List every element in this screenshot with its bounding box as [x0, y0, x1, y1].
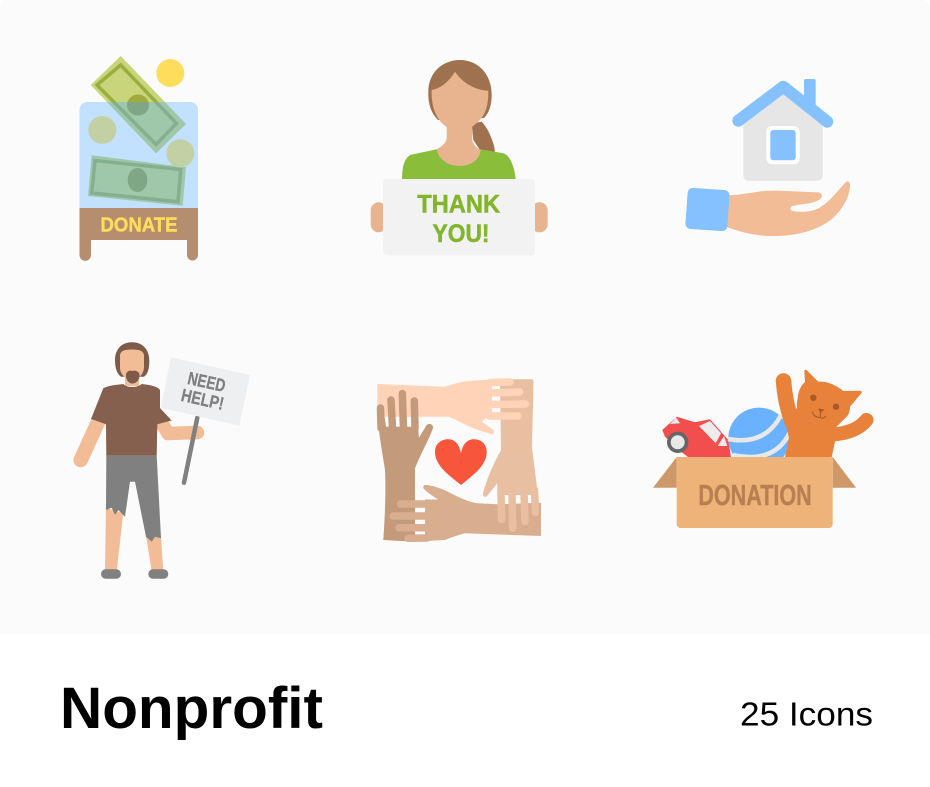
sign text: YOU!: YOU! [432, 220, 490, 248]
bottom hand [423, 485, 541, 541]
sleeve [685, 188, 730, 231]
ponytail [472, 122, 495, 152]
toy car [662, 417, 731, 457]
top hand palm and arm [377, 380, 494, 434]
legs [105, 508, 163, 571]
right hand fingers [501, 490, 536, 528]
board glass [80, 102, 198, 208]
left shoe [101, 569, 121, 579]
hand [726, 181, 850, 236]
hair [115, 342, 149, 377]
cat [784, 370, 866, 457]
roof [738, 87, 827, 122]
sign board [161, 357, 250, 426]
lower banknote [88, 155, 186, 206]
hair [428, 60, 492, 120]
green shirt [402, 149, 516, 180]
green coin right [166, 139, 194, 167]
sign text: HELP!: HELP! [179, 385, 226, 414]
house body [743, 90, 823, 181]
top hand fingers [490, 382, 526, 416]
icon count: 25 Icons [740, 696, 873, 733]
icon: house in a hand [685, 79, 850, 236]
window frame [766, 126, 800, 164]
heart [435, 439, 487, 485]
chimney [804, 79, 816, 108]
box label: DONATION: DONATION [698, 480, 812, 512]
sign text: THANK: THANK [417, 190, 500, 218]
yellow coin [156, 59, 184, 87]
sign board [383, 179, 535, 255]
left hand [377, 405, 433, 542]
right shoe [148, 569, 168, 579]
green coin left [88, 116, 116, 144]
brown base with legs [80, 208, 198, 261]
sign pole [184, 418, 197, 483]
ball [728, 408, 789, 457]
sign text: NEED: NEED [186, 368, 227, 396]
face and neck [432, 72, 488, 166]
falling banknote [91, 56, 186, 153]
title: Nonprofit [60, 676, 323, 741]
left arm [81, 420, 99, 460]
icon: four hands around a heart [377, 379, 541, 542]
face and neck [120, 350, 144, 386]
icon: donation board with money [80, 56, 198, 261]
right arm [160, 420, 198, 434]
label: DONATE: DONATE [100, 214, 178, 236]
left hand [371, 202, 387, 232]
left hand fingers [380, 394, 415, 428]
icon: man holding need help sign [81, 342, 250, 579]
beard [126, 371, 140, 384]
right flap [833, 457, 856, 488]
icon: woman holding thank you sign [371, 60, 548, 255]
box front [677, 457, 833, 528]
bottom hand fingers [393, 504, 427, 538]
torn trousers [106, 456, 161, 542]
brown shirt [91, 384, 172, 456]
window [770, 130, 796, 160]
icon: donation box with toys [653, 370, 866, 528]
left flap [653, 457, 677, 488]
right hand palm and arm [483, 379, 538, 497]
right hand [531, 202, 548, 232]
